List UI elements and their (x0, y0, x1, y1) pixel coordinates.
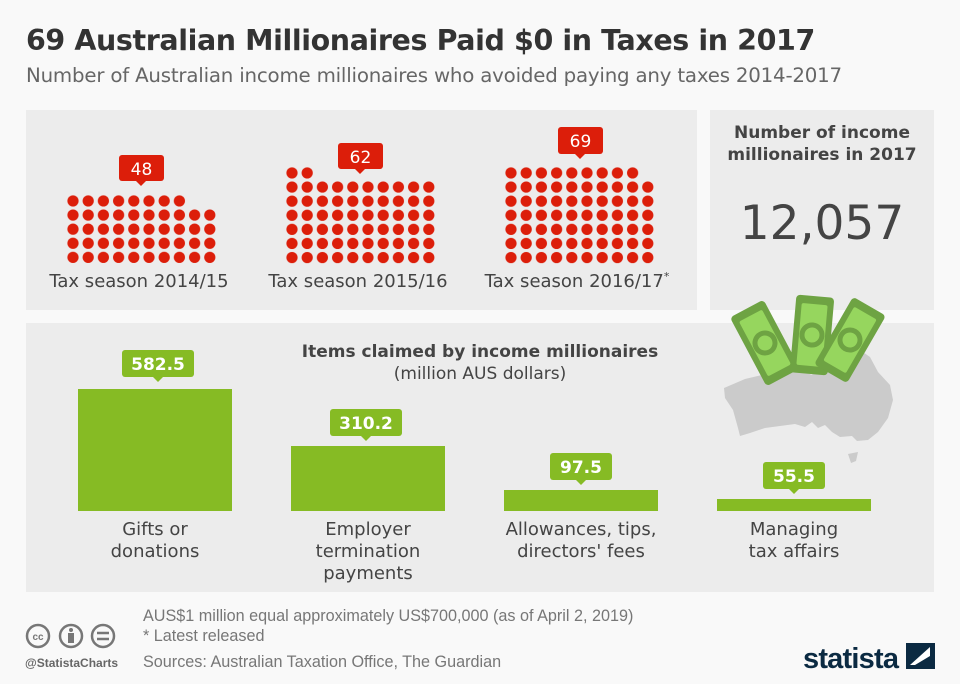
panel: millionaires count (710, 110, 934, 310)
callout 69: 69 (570, 132, 591, 152)
label 2015/16: Tax season 2015/16 (267, 271, 448, 292)
icon: creative commons: cc (32, 632, 44, 643)
footnotes: AUS$1 million equal approximately US$700,000 (as of April 2, 2019) (143, 607, 633, 625)
callout 69 (558, 127, 603, 159)
label 2016/17: Tax season 2016/17 (485, 271, 664, 292)
bar: gifts or donations: 582.5 (131, 355, 185, 375)
bar: gifts or donations (78, 350, 232, 562)
bar: employer termination payments: payments (323, 563, 413, 584)
callout 62: 62 (350, 148, 371, 168)
bar: gifts or donations: donations (111, 541, 199, 562)
subtitle: Number of Australian income millionaires who avoided paying any taxes 2014-2017 (26, 64, 842, 87)
bar: managing tax affairs: tax affairs (749, 541, 839, 562)
bar: allowances (504, 453, 658, 562)
dots 2015/16 (284, 166, 436, 265)
bar: employer termination payments: Employer (325, 519, 411, 540)
dots 2014/15 (65, 194, 217, 264)
footnotes: Sources: Australian Taxation Office, The Guardian (143, 653, 501, 671)
big number: 12,057 (740, 196, 904, 251)
callout 62 (338, 143, 383, 174)
bar: allowances: 97.5 (560, 458, 602, 478)
heading: items claimed: (million AUS dollars) (394, 364, 566, 384)
heading: number of income millionaires: Number of income (734, 123, 910, 143)
logo: statista: statista (803, 643, 900, 675)
icon: money bills (730, 294, 886, 386)
bar: employer termination payments: 310.2 (339, 414, 393, 434)
bar: employer termination payments: termination (316, 541, 420, 562)
callout 48: 48 (131, 160, 152, 180)
bar: gifts or donations: Gifts or (122, 519, 188, 540)
bar: employer termination payments (291, 409, 445, 584)
heading: items claimed: Items claimed by income millionaires (302, 342, 658, 362)
title: 69 Australian Millionaires Paid $0 in Taxes in 2017 (26, 24, 815, 57)
icon: creative commons (27, 625, 114, 647)
bar: allowances: Allowances, tips, (506, 519, 656, 540)
bar: managing tax affairs: 55.5 (773, 467, 815, 487)
callout 48 (119, 155, 164, 186)
bar: managing tax affairs (717, 462, 871, 562)
heading: items claimed (302, 342, 658, 384)
bar: allowances: directors' fees (517, 541, 645, 562)
heading: number of income millionaires: millionaires in 2017 (727, 145, 917, 165)
heading: number of income millionaires (727, 123, 917, 165)
map of Australia (724, 350, 893, 463)
dots 2016/17 (503, 166, 655, 265)
footnotes: * Latest released (143, 627, 264, 645)
label 2014/15: Tax season 2014/15 (48, 271, 229, 292)
panel: items claimed (26, 323, 934, 592)
handle: @StatistaCharts (25, 656, 118, 670)
panel: tax seasons (26, 110, 697, 310)
bar: managing tax affairs: Managing (750, 519, 838, 540)
label 2016/17: * (664, 270, 670, 283)
footnotes (143, 607, 633, 671)
